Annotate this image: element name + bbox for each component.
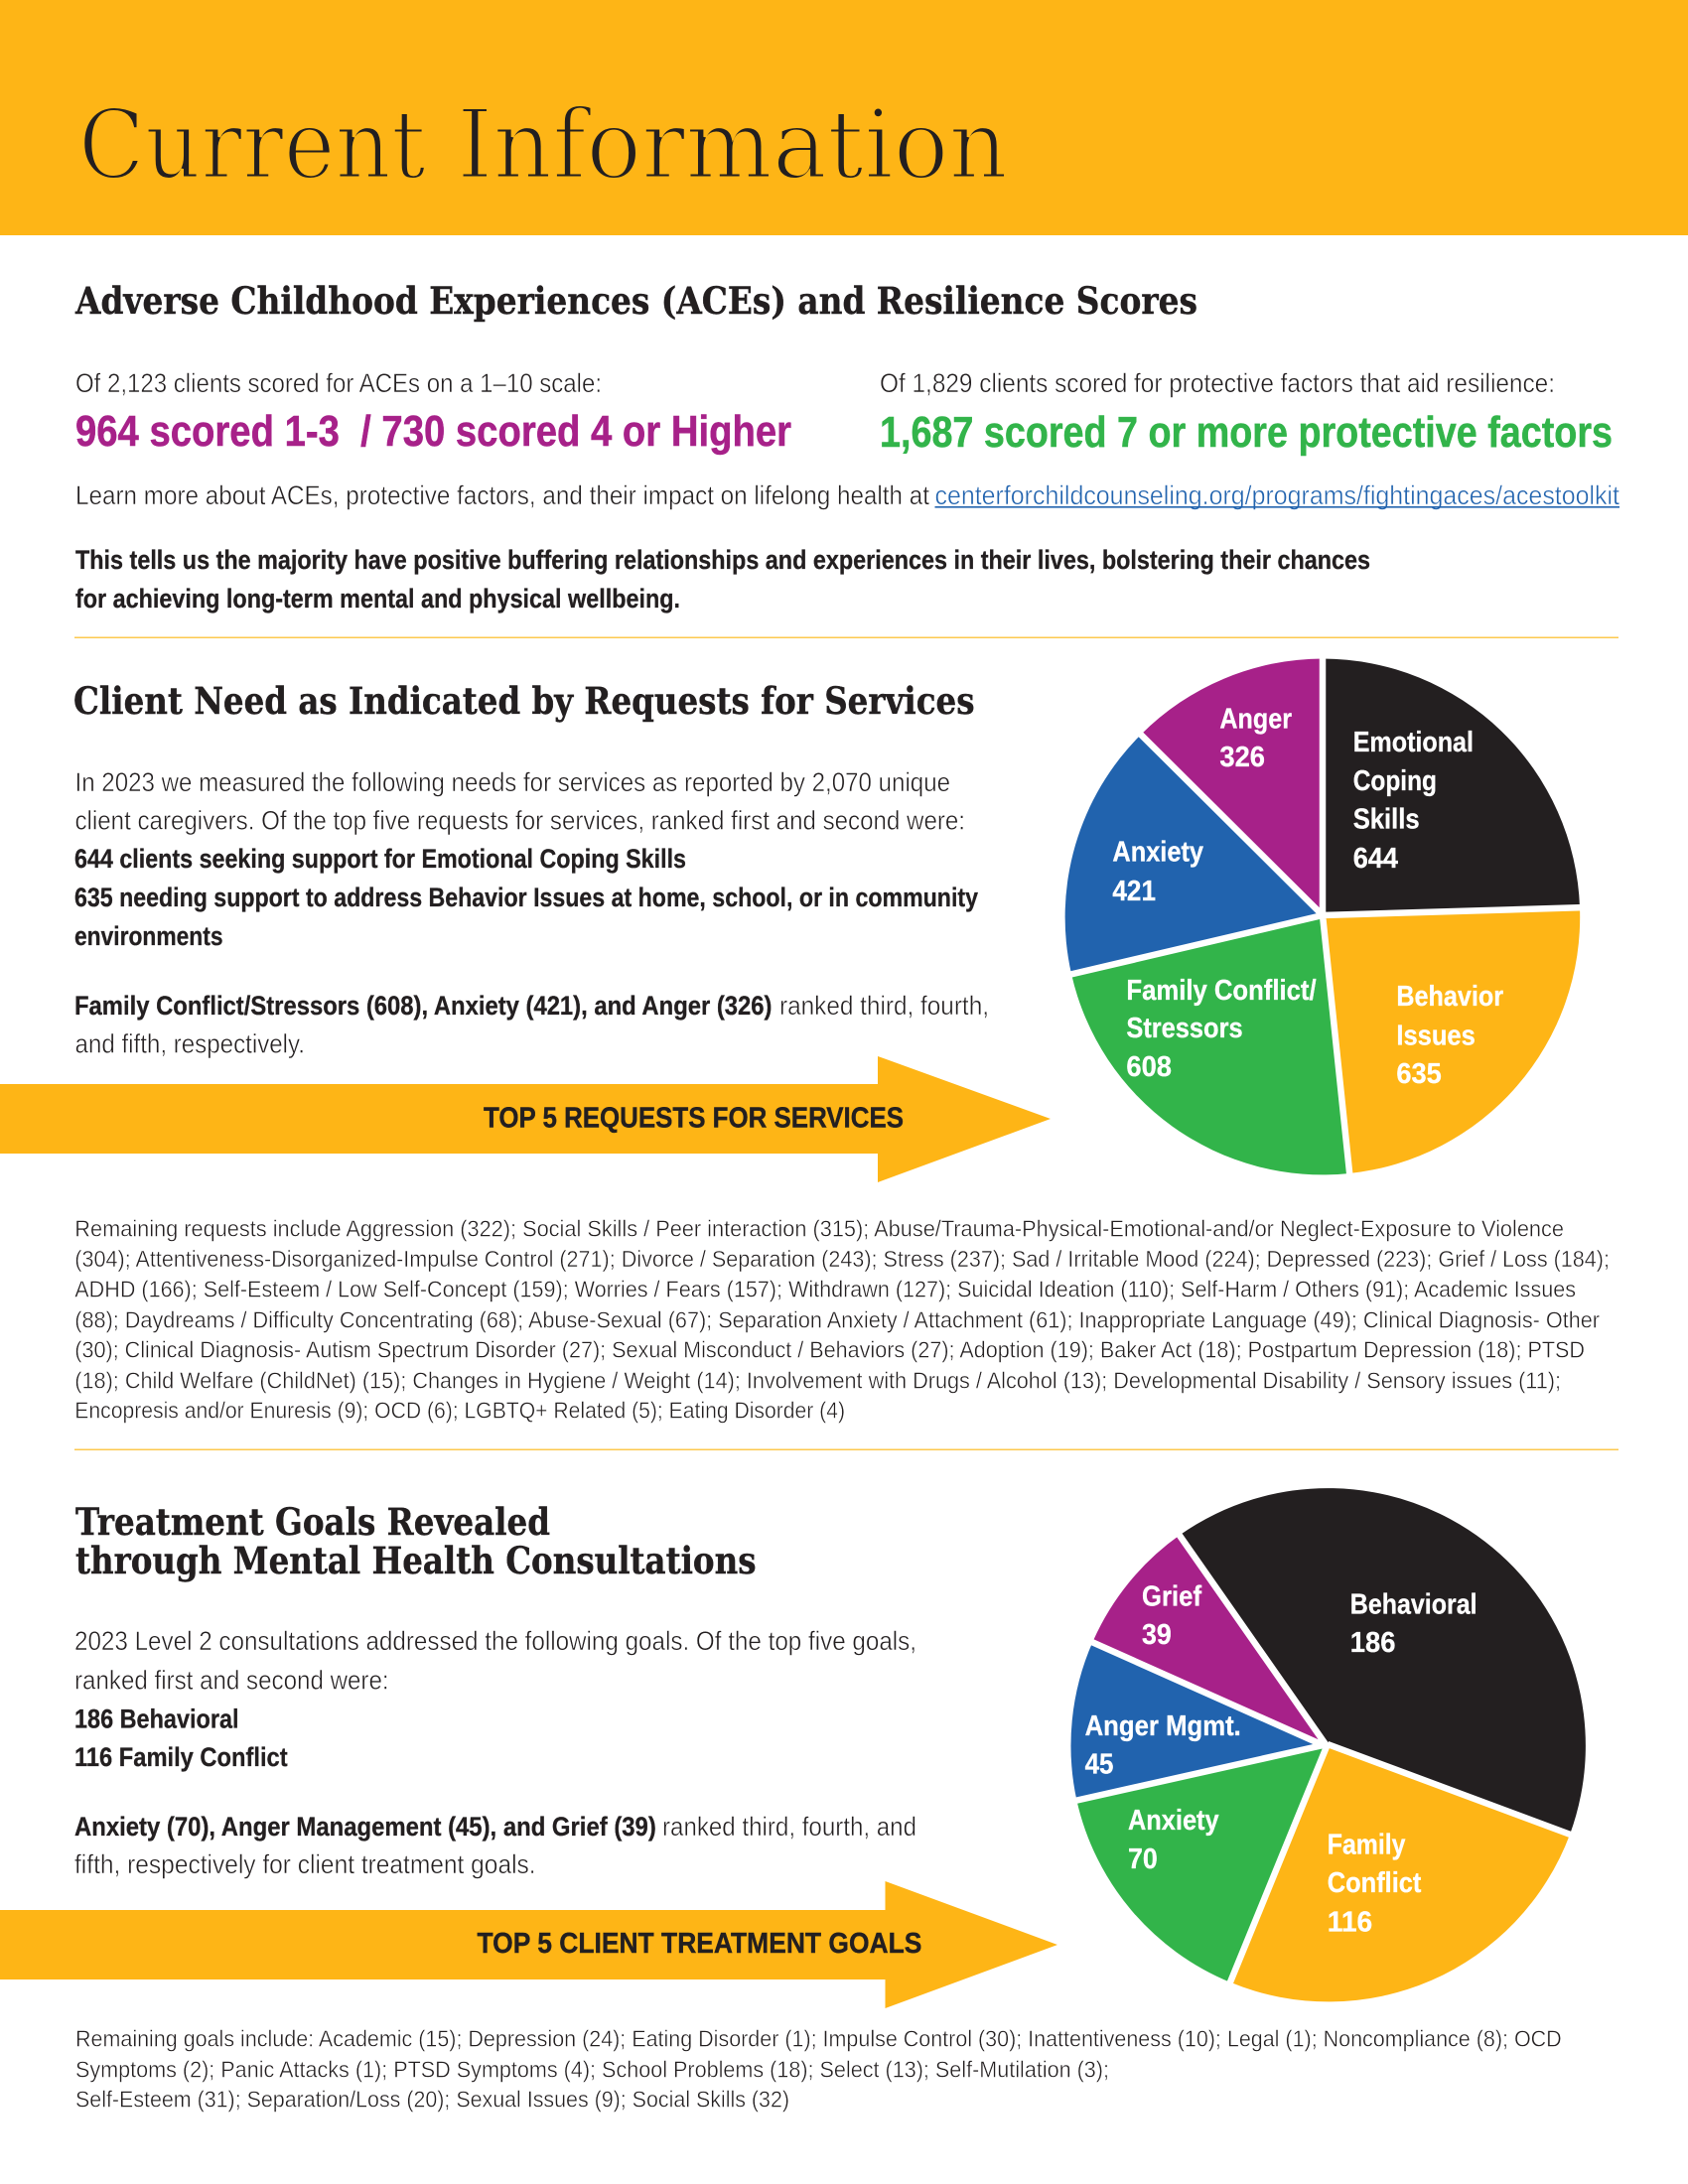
- text: treatment goals body: 116 Family Conflict: [74, 1742, 288, 1772]
- heading: client need: Client Need as Indicated by Requests for Services: [73, 679, 975, 723]
- slice: anger: 326: [1219, 742, 1265, 773]
- text: remaining goals: Symptoms (2); Panic Attacks (1); PTSD Symptoms (4); School Problems (18); Select (13); Self-Mutilation (3);: [75, 2057, 1109, 2083]
- slice: anxiety: 70: [1128, 1843, 1158, 1875]
- text: client need body: In 2023 we measured the following needs for services as reported by 2,070 unique: [75, 767, 950, 797]
- text: ACEs intro: Of 2,123 clients scored for ACEs on a 1–10 scale:: [75, 368, 602, 398]
- text: remaining goals: [75, 2026, 1562, 2113]
- slice: family conflict: Family Conflict/: [1126, 975, 1317, 1007]
- arrow: top 5 requests: [0, 1056, 1051, 1182]
- text: treatment goals body: 186 Behavioral: [74, 1705, 238, 1734]
- arrow: top 5 treatment goals: [0, 1881, 1057, 2008]
- slice: emotional coping skills: Emotional: [1353, 727, 1474, 758]
- heading: treatment goals: [75, 1500, 757, 1582]
- slice: family conflict: 116: [1328, 1906, 1372, 1938]
- slice: behavior issues: Issues: [1396, 1021, 1476, 1052]
- text: remaining requests: [74, 1216, 1610, 1423]
- text: client need body: client caregivers. Of the top five requests for services, ranked first and second were:: [75, 806, 965, 836]
- text: treatment goals body: ranked first and second were:: [74, 1666, 389, 1696]
- slice: grief: Grief: [1142, 1580, 1201, 1612]
- header band: [0, 0, 1688, 235]
- text: takeaway: This tells us the majority have positive buffering relationships and experiences in their lives, bolstering their chances: [75, 545, 1370, 575]
- text: treatment goals body: fifth, respectively for client treatment goals.: [74, 1849, 536, 1879]
- slice: behavior issues: [1323, 907, 1580, 1173]
- slice: anxiety: [1076, 1744, 1326, 1982]
- slice: behavior issues: 635: [1396, 1058, 1442, 1090]
- text: client need body: 635 needing support to address Behavior Issues at home, school, or in community: [74, 883, 978, 912]
- title: Current: [78, 89, 426, 201]
- text: client need body: ranked third, fourth,: [779, 991, 989, 1021]
- text: treatment goals body: [74, 1626, 916, 1879]
- pie chart: top 5 requests: [1064, 650, 1587, 1181]
- slice: emotional coping skills: 644: [1353, 843, 1398, 875]
- text: remaining requests: (88); Daydreams / Difficulty Concentrating (68); Abuse-Sexual (67); Separation Anxiety / Attachment (61); Inappropriate Language (49); Clinical Diagnosis- Other: [74, 1306, 1600, 1332]
- text: takeaway: for achieving long-term mental and physical wellbeing.: [75, 584, 680, 614]
- arrow: top 5 requests: TOP 5 REQUESTS FOR SERVICES: [484, 1103, 904, 1135]
- slice: behavioral: 186: [1350, 1627, 1396, 1659]
- slice: emotional coping skills: [1323, 659, 1580, 915]
- text: takeaway: [75, 545, 1370, 614]
- heading: ACEs: Adverse Childhood Experiences (ACEs) and Resilience Scores: [74, 279, 1197, 323]
- link: toolkit: centerforchildcounseling.org/programs/fightingaces/acestoolkit: [935, 480, 1619, 510]
- slice: family conflict: Family: [1328, 1829, 1406, 1860]
- text: client need body: Family Conflict/Stressors (608), Anxiety (421), and Anger (326): [74, 991, 773, 1021]
- text: remaining requests: ADHD (166); Self-Esteem / Low Self-Concept (159); Worries / Fears (157); Withdrawn (127); Suicidal Ideation (110); Self-Harm / Others (91); Academic Issues: [74, 1277, 1576, 1302]
- slice: family conflict: [1230, 1744, 1570, 2001]
- slice: behavior issues: Behavior: [1396, 981, 1503, 1013]
- slice: anxiety: Anxiety: [1128, 1805, 1219, 1837]
- slice: anxiety: [1065, 735, 1323, 974]
- slice: family conflict: Conflict: [1328, 1867, 1422, 1899]
- title: [78, 89, 1008, 201]
- slice: grief: 39: [1142, 1619, 1172, 1651]
- heading: treatment goals: through Mental Health Consultations: [75, 1539, 757, 1582]
- pie chart: top 5 treatment goals: [1070, 1488, 1586, 2001]
- slice: anxiety: 421: [1112, 876, 1156, 907]
- text: client need body: environments: [74, 921, 222, 951]
- heading: treatment goals: Treatment Goals Revealed: [75, 1500, 550, 1544]
- text: learn more: Learn more about ACEs, protective factors, and their impact on lifelong health at: [75, 480, 929, 510]
- slice: anger management: [1070, 1642, 1326, 1801]
- text: remaining goals: Remaining goals include: Academic (15); Depression (24); Eating Disorder (1); Impulse Control (30); Inattentiveness (10); Legal (1); Noncompliance (8); OCD: [75, 2026, 1562, 2052]
- text: remaining requests: Encopresis and/or Enuresis (9); OCD (6); LGBTQ+ Related (5); Eating Disorder (4): [74, 1397, 845, 1423]
- section: treatment goals: [0, 1488, 1586, 2113]
- text: remaining goals: Self-Esteem (31); Separation/Loss (20); Sexual Issues (9); Social Skills (32): [75, 2087, 789, 2113]
- text: remaining requests: (30); Clinical Diagnosis- Autism Spectrum Disorder (27); Sexual Misconduct / Behaviors (27); Adoption (19); Baker Act (18); Postpartum Depression (18); PTSD: [74, 1337, 1585, 1363]
- slice: family conflict: Stressors: [1126, 1013, 1243, 1044]
- text: remaining requests: (18); Child Welfare (ChildNet) (15); Changes in Hygiene / Weight (14); Involvement with Drugs / Alcohol (13); Developmental Disability / Sensory issues (11);: [74, 1367, 1561, 1393]
- stat: ACEs scores: 964 scored 1-3 / 730 scored 4 or Higher: [75, 407, 791, 456]
- text: client need body: and fifth, respectively.: [75, 1029, 305, 1059]
- slice: emotional coping skills: Coping: [1353, 765, 1437, 797]
- section: client need: [0, 650, 1610, 1423]
- slice: anxiety: Anxiety: [1112, 836, 1203, 868]
- slice: anger management: Anger Mgmt.: [1085, 1710, 1241, 1742]
- slice: anger: [1141, 659, 1323, 915]
- slice: emotional coping skills: Skills: [1353, 804, 1420, 836]
- text: treatment goals body: 2023 Level 2 consultations addressed the following goals. Of the top five goals,: [74, 1626, 916, 1656]
- slice: family conflict: [1071, 915, 1349, 1174]
- text: remaining requests: Remaining requests include Aggression (322); Social Skills / Peer interaction (315); Abuse/Trauma-Physical-Emotional-and/or Neglect-Exposure to Violence: [74, 1216, 1564, 1242]
- slice: grief: [1092, 1535, 1326, 1744]
- text: client need body: 644 clients seeking support for Emotional Coping Skills: [74, 844, 686, 874]
- slice: behavioral: Behavioral: [1350, 1588, 1477, 1620]
- section: ACEs and resilience scores: [74, 279, 1619, 614]
- slice: family conflict: 608: [1126, 1051, 1172, 1083]
- slice: behavioral: [1180, 1488, 1586, 1835]
- title: Information: [457, 89, 1008, 201]
- text: treatment goals body: Anxiety (70), Anger Management (45), and Grief (39): [74, 1812, 656, 1842]
- slice: anger management: 45: [1085, 1748, 1113, 1780]
- arrow: top 5 treatment goals: TOP 5 CLIENT TREATMENT GOALS: [477, 1928, 921, 1960]
- text: client need body: [74, 767, 989, 1059]
- text: resilience intro: Of 1,829 clients scored for protective factors that aid resilience:: [880, 368, 1555, 398]
- text: treatment goals body: ranked third, fourth, and: [662, 1812, 916, 1842]
- slice: anger: Anger: [1219, 704, 1292, 736]
